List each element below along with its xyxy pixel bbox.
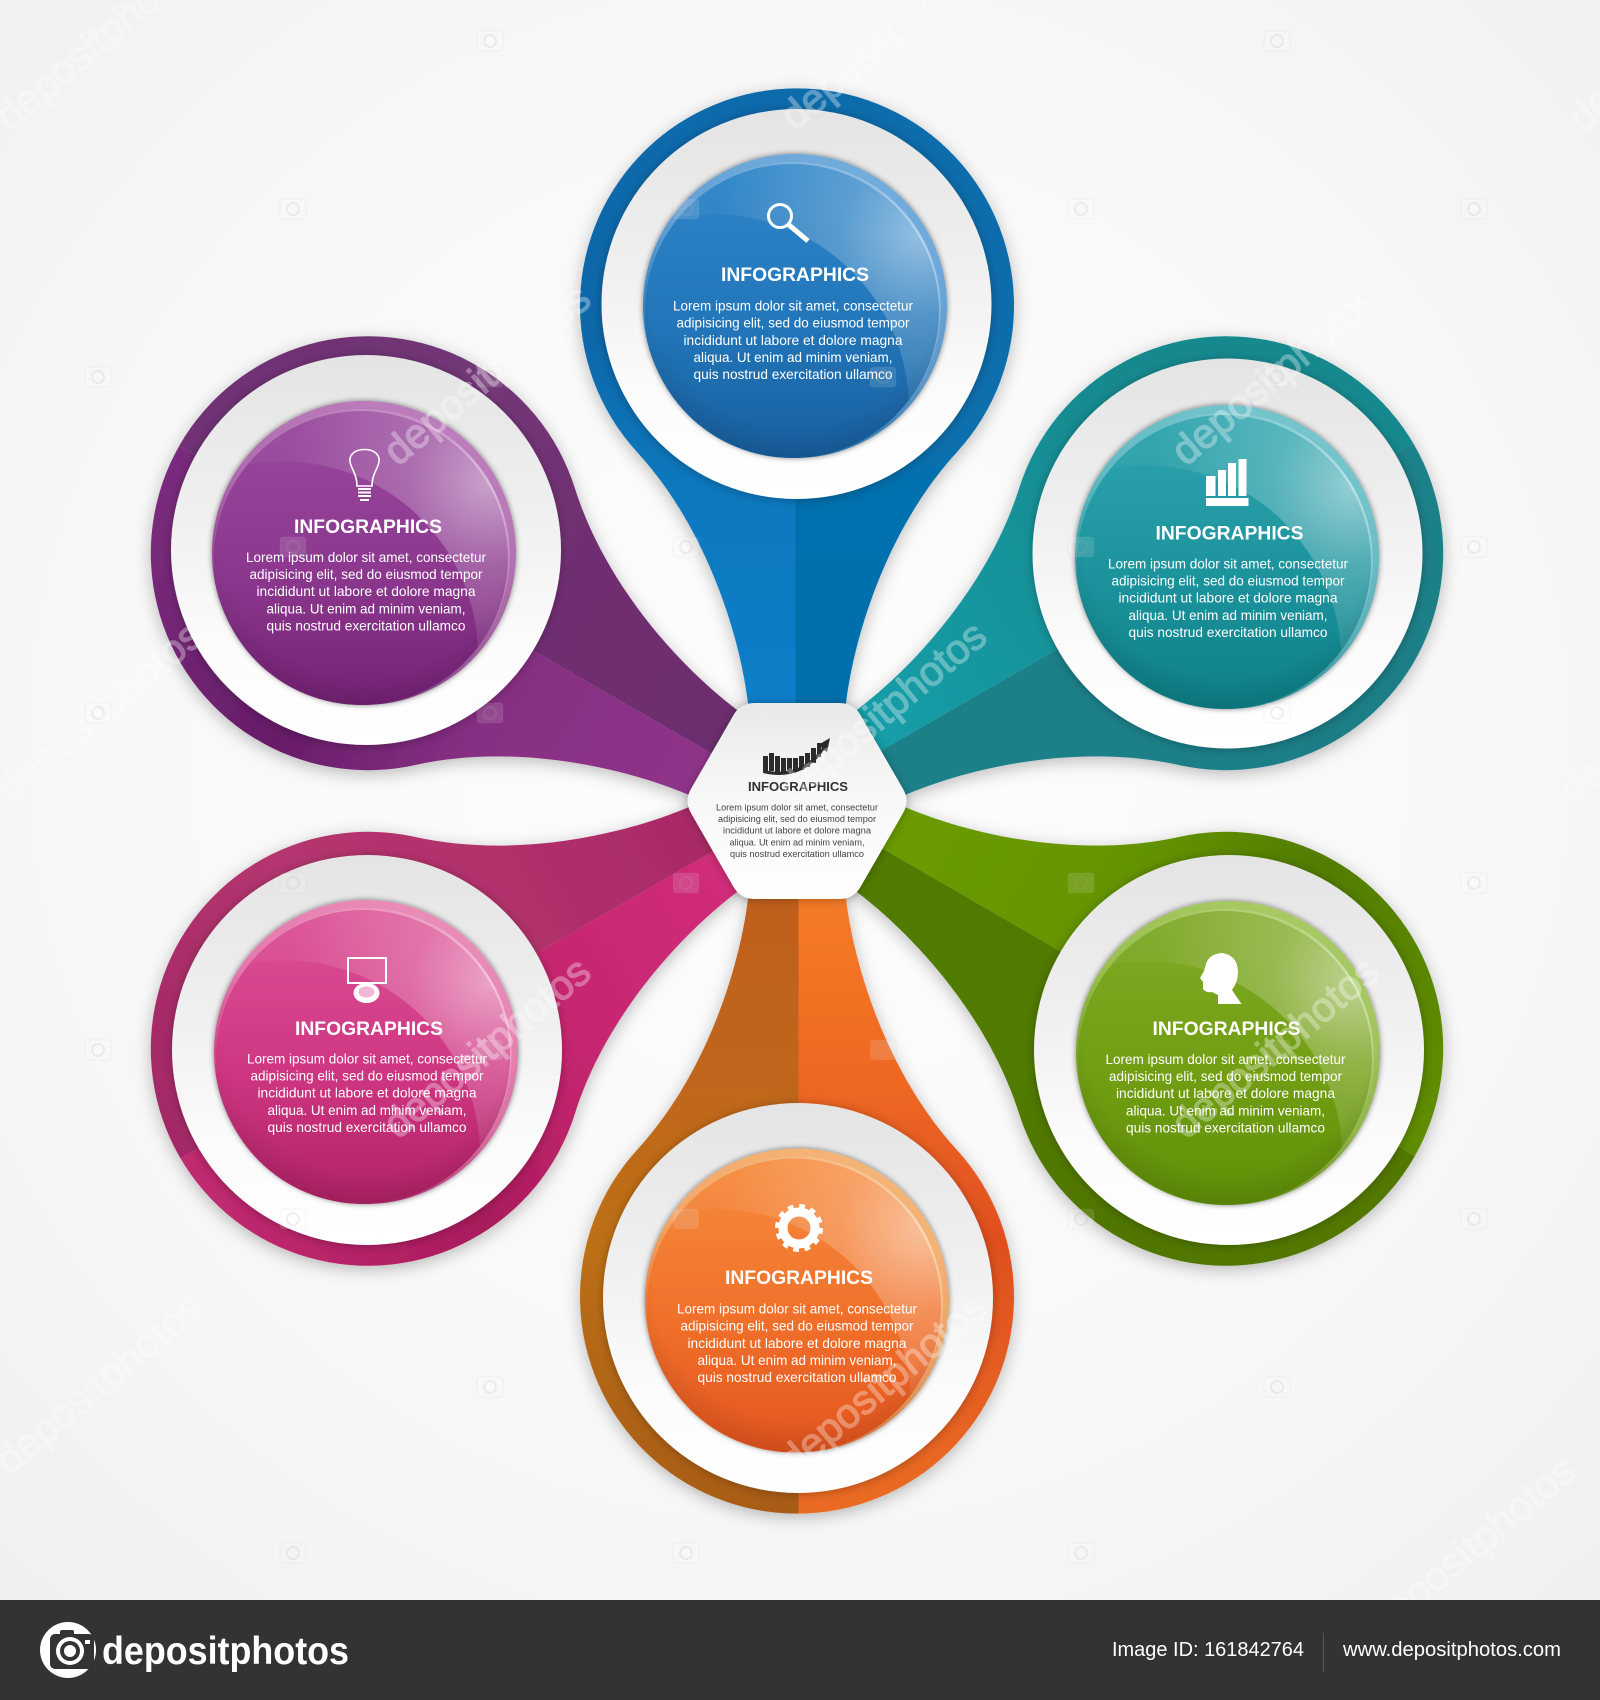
body text [247, 1052, 487, 1135]
hexagon shape [688, 703, 906, 899]
petal: green (lower right) [847, 803, 1452, 1278]
body text: Lorem ipsum dolor sit amet, consectetur [677, 1302, 917, 1316]
icon: gear [778, 1207, 820, 1249]
heading: INFOGRAPHICS [295, 1018, 443, 1040]
body text: quis nostrud exercitation ullamco [266, 618, 466, 633]
glass disc [1076, 901, 1380, 1205]
white ring [603, 1103, 993, 1493]
watermark overlay: depositphotos [374, 275, 599, 474]
body text: adipisicing elit, sed do eiusmod tempor [676, 316, 910, 331]
hexagon body text: adipisicing elit, sed do eiusmod tempor [718, 813, 876, 824]
watermark overlay: depositphotos [1162, 948, 1387, 1147]
glass disc [645, 1148, 949, 1452]
image id: Image ID: 161842764 [1112, 1639, 1304, 1661]
body text: aliqua. Ut enim ad minim veniam, [1126, 1103, 1325, 1118]
body text: Lorem ipsum dolor sit amet, consectetur [673, 298, 913, 314]
watermark overlay: depositphotos [1162, 275, 1387, 474]
center hexagon [688, 703, 906, 899]
panel: orange circle [603, 1103, 993, 1493]
body text: aliqua. Ut enim ad minim veniam, [698, 1353, 896, 1368]
body text: quis nostrud exercitation ullamco [694, 367, 893, 382]
icon: human head [1200, 953, 1242, 1004]
hexagon body text: quis nostrud exercitation ullamco [730, 848, 864, 859]
body text: incididunt ut labore et dolore magna [688, 1336, 907, 1351]
icon: bar chart [1206, 459, 1248, 506]
petal: blue (top) [572, 84, 1022, 708]
panel: blue circle [602, 109, 992, 499]
logo wordmark: depositphotos [102, 1630, 349, 1673]
heading: INFOGRAPHICS [1156, 522, 1304, 544]
website url: www.depositphotos.com [1342, 1639, 1561, 1661]
body text: adipisicing elit, sed do eiusmod tempor [1109, 1069, 1342, 1084]
white ring [171, 355, 561, 745]
hexagon body text: Lorem ipsum dolor sit amet, consectetur [716, 802, 878, 812]
hexagon heading: INFOGRAPHICS [748, 779, 848, 794]
hexagon body text [716, 802, 878, 859]
body text: adipisicing elit, sed do eiusmod tempor [250, 567, 483, 582]
petal: purple (upper left) [142, 332, 741, 808]
panel: green circle [1034, 855, 1424, 1245]
watermark overlay: depositphotos [770, 612, 995, 811]
body text: adipisicing elit, sed do eiusmod tempor [1112, 574, 1345, 588]
body text: aliqua. Ut enim ad minim veniam, [694, 350, 892, 365]
watermark overlay: depositphotos [770, 1284, 995, 1483]
body text [677, 1302, 917, 1385]
watermark overlay: depositphotos [374, 948, 599, 1147]
hexagon body text: aliqua. Ut enim ad minim veniam, [730, 836, 864, 847]
body text [1108, 556, 1348, 640]
body text: Lorem ipsum dolor sit amet, consectetur [1108, 556, 1348, 572]
body text: aliqua. Ut enim ad minim veniam, [268, 1103, 466, 1118]
petal: pink (lower left) [142, 802, 747, 1278]
white ring [602, 109, 992, 499]
body text: incididunt ut labore et dolore magna [1118, 591, 1338, 606]
glass disc [1075, 405, 1379, 709]
body text: quis nostrud exercitation ullamco [698, 1370, 897, 1385]
white ring [172, 855, 562, 1245]
body text: quis nostrud exercitation ullamco [1126, 1120, 1325, 1135]
glass disc [212, 401, 516, 705]
body text: Lorem ipsum dolor sit amet, consectetur [246, 550, 486, 565]
heading: INFOGRAPHICS [725, 1267, 873, 1289]
body text: quis nostrud exercitation ullamco [268, 1120, 467, 1135]
icon: rising bar chart with arrow [763, 738, 830, 775]
body text: adipisicing elit, sed do eiusmod tempor [680, 1319, 914, 1334]
petal: teal (upper right) [853, 332, 1452, 808]
panel: teal circle [1032, 358, 1422, 748]
heading: INFOGRAPHICS [1152, 1018, 1300, 1040]
white ring [1034, 855, 1424, 1245]
body text: adipisicing elit, sed do eiusmod tempor [250, 1069, 484, 1084]
watermark overlay: depositphotos [1359, 1447, 1584, 1646]
body text: aliqua. Ut enim ad minim veniam, [1128, 608, 1328, 623]
body text: quis nostrud exercitation ullamco [1128, 625, 1328, 640]
body text: incididunt ut labore et dolore magna [256, 584, 476, 599]
body text [246, 550, 486, 633]
glass disc [214, 900, 518, 1204]
body text [1106, 1052, 1346, 1135]
petal: orange (bottom) [572, 895, 1022, 1526]
heading: INFOGRAPHICS [294, 516, 442, 538]
body text: incididunt ut labore et dolore magna [1116, 1086, 1335, 1101]
icon: light bulb [350, 450, 379, 500]
body text: incididunt ut labore et dolore magna [684, 333, 903, 348]
body text: Lorem ipsum dolor sit amet, consectetur [1106, 1052, 1346, 1067]
heading: INFOGRAPHICS [721, 264, 869, 286]
hexagon body text: incididunt ut labore et dolore magna [723, 825, 872, 836]
icon: magnifier [768, 204, 808, 241]
body text [673, 298, 913, 382]
body text: aliqua. Ut enim ad minim veniam, [266, 601, 466, 616]
glass disc [643, 154, 947, 458]
body text: Lorem ipsum dolor sit amet, consectetur [247, 1052, 487, 1066]
icon: monitor [348, 958, 386, 1003]
panel: purple circle [171, 355, 561, 745]
body text: incididunt ut labore et dolore magna [258, 1086, 477, 1101]
icon: camera logo [40, 1622, 96, 1678]
footer bar [0, 1600, 1600, 1700]
white ring [1032, 358, 1422, 748]
panel: pink circle [172, 855, 562, 1245]
